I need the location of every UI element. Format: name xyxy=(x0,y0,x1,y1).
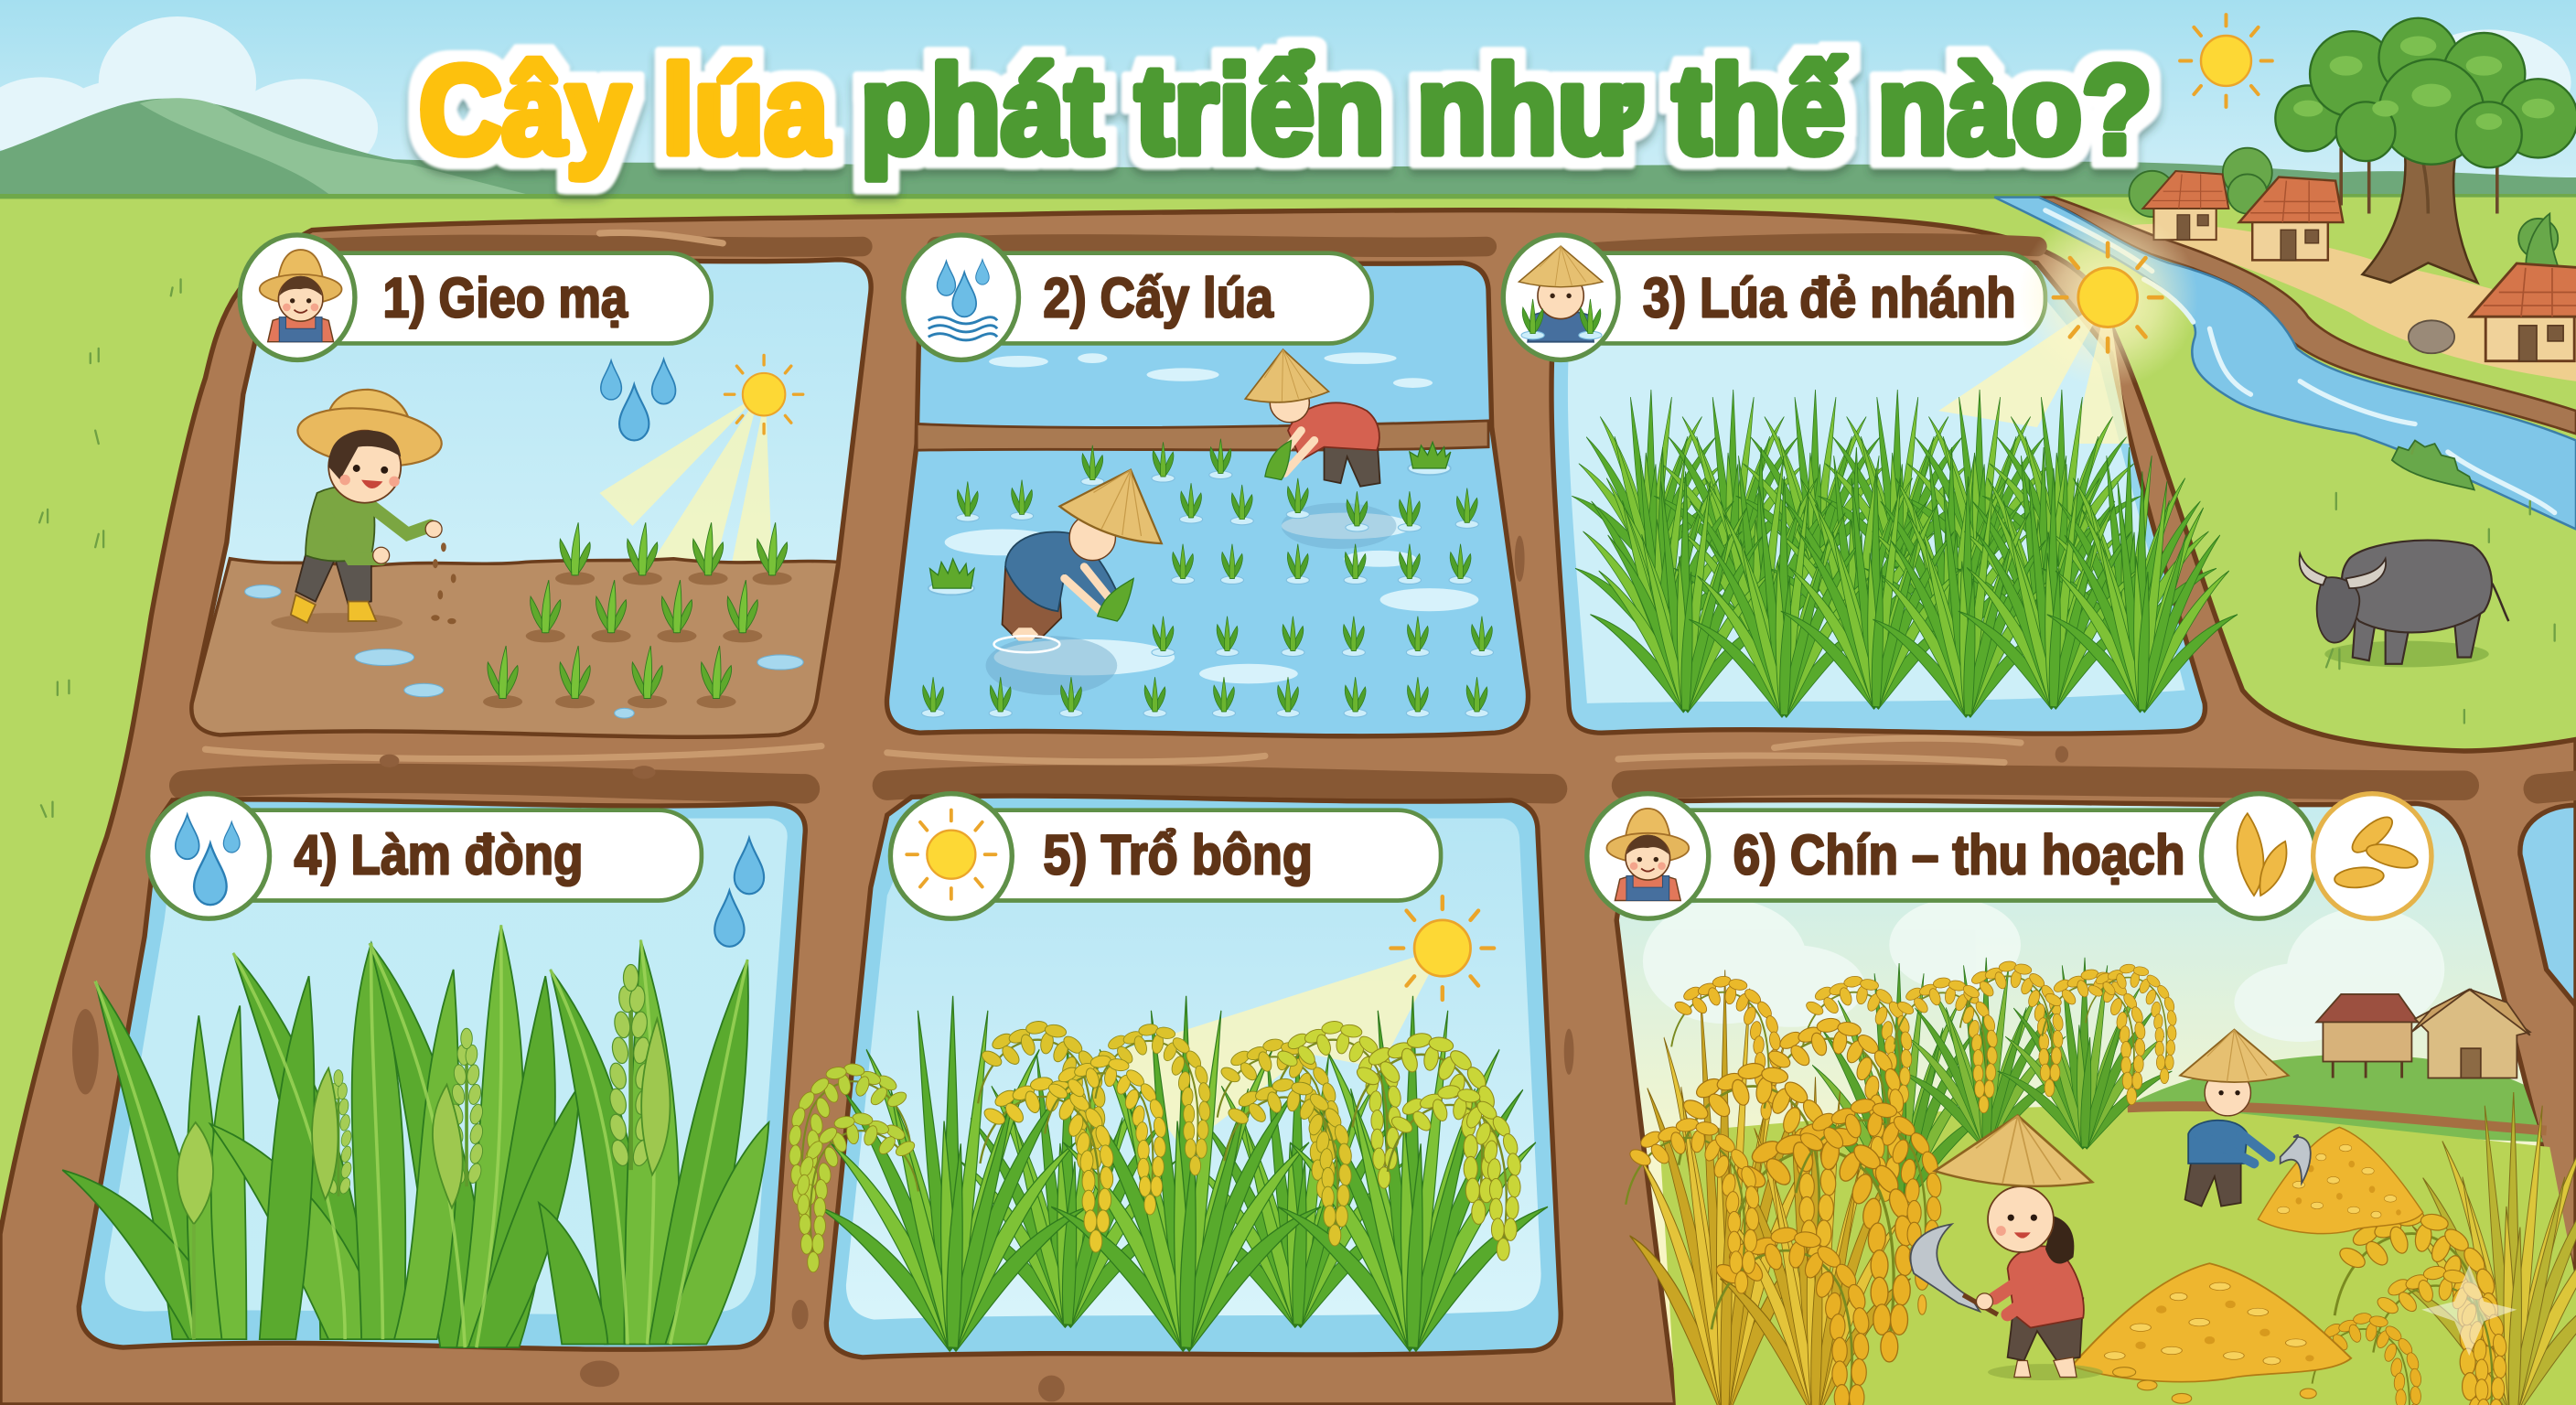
panel 4: Làm đòng xyxy=(62,799,805,1349)
sun beams xyxy=(1938,297,2130,444)
soil xyxy=(192,559,838,736)
badge: rice ears xyxy=(2202,794,2316,918)
water reflection xyxy=(986,636,1117,695)
sky xyxy=(1616,800,2576,1405)
badge: rice grains xyxy=(2313,794,2431,918)
panel 5: Trổ bông xyxy=(788,796,1561,1376)
label 4: Làm đòng xyxy=(148,794,702,918)
sun xyxy=(724,355,803,434)
badge: farmer avatar xyxy=(240,235,355,359)
transplanted seedlings xyxy=(922,439,1493,717)
panel 7 fragment at right edge xyxy=(2520,805,2576,1005)
grain heap large xyxy=(2072,1263,2351,1382)
label text: 3) Lúa đẻ nhánh xyxy=(1643,267,2016,329)
badge: sun xyxy=(890,794,1012,918)
sky and distant landscape xyxy=(0,0,2576,206)
label 6: Chín – thu hoạch xyxy=(1587,794,2431,918)
bush and rock by house xyxy=(2409,320,2454,353)
title: Cây lúa phát triển như thế nào? xyxy=(419,39,2152,179)
inner pale area xyxy=(1568,279,2185,703)
clouds xyxy=(1643,899,2444,1042)
soil puddles xyxy=(245,585,803,718)
farmer in red bending xyxy=(1241,346,1380,487)
buffalo xyxy=(2300,541,2508,667)
back rice plants xyxy=(1803,958,2177,1228)
house middle xyxy=(2239,177,2343,260)
badge: farmer avatar xyxy=(1587,794,1709,918)
seedlings xyxy=(483,522,792,708)
tall leaves and panicles xyxy=(62,925,768,1347)
glow and sun on panel 3 xyxy=(2017,207,2198,388)
house left xyxy=(2143,171,2228,240)
houses xyxy=(2316,989,2530,1078)
label text: 4) Làm đòng xyxy=(294,824,584,886)
ground xyxy=(1659,1106,2576,1405)
far bank xyxy=(2039,198,2576,431)
river highlights xyxy=(2045,210,2555,513)
river water xyxy=(1994,198,2576,529)
label text: 6) Chín – thu hoạch xyxy=(1733,824,2185,886)
panel background xyxy=(826,796,1561,1357)
grass tufts xyxy=(39,279,2555,817)
inner pale area xyxy=(105,819,788,1314)
harvester at back xyxy=(2180,1030,2311,1207)
dividing bund xyxy=(917,421,1488,450)
reflection 2 xyxy=(1282,503,1397,549)
young panicle sheaths xyxy=(177,964,671,1339)
panel 3: Lúa đẻ nhánh xyxy=(1551,260,2238,734)
sun rays xyxy=(600,394,772,567)
label 5: Trổ bông xyxy=(890,794,1441,918)
house right xyxy=(2470,263,2576,361)
panel background xyxy=(79,799,805,1349)
small sun in sky xyxy=(2180,15,2272,107)
clouds xyxy=(0,16,2571,177)
label text: 1) Gieo mạ xyxy=(382,267,628,329)
badge: farmer with seedlings xyxy=(1503,235,1618,359)
leaf midribs xyxy=(95,925,747,1347)
river-side bush xyxy=(2392,440,2474,489)
far bank village and tree xyxy=(2130,15,2576,489)
hills xyxy=(0,98,2576,206)
sun beams xyxy=(1117,949,1443,1151)
panel 6: Chín – thu hoạch xyxy=(1616,800,2576,1405)
corner golden rice right xyxy=(2313,1092,2576,1405)
rice tufts xyxy=(1572,390,2238,734)
label 2: Cấy lúa xyxy=(904,235,1372,359)
raindrops xyxy=(601,359,675,440)
panel 1: Gieo mạ xyxy=(192,260,871,736)
horizon line xyxy=(0,194,2576,198)
river bank xyxy=(2039,198,2576,434)
grain heap small xyxy=(2258,1127,2423,1234)
back hill xyxy=(2136,1055,2543,1142)
harvester in front xyxy=(1911,1110,2103,1380)
banyan tree xyxy=(2275,18,2576,283)
flooded paddy xyxy=(886,262,1529,736)
water sheen xyxy=(945,352,1478,683)
label 3: Lúa đẻ nhánh xyxy=(1503,235,2045,359)
sun xyxy=(1391,896,1494,1000)
field dyke xyxy=(2128,1106,2547,1131)
farmer sowing seeds xyxy=(271,390,456,633)
bushes xyxy=(2130,148,2563,279)
label text: 5) Trổ bông xyxy=(1043,824,1313,886)
label 1: Gieo mạ xyxy=(240,235,712,359)
river and right-hand bank xyxy=(1994,198,2576,529)
inner pale area xyxy=(846,819,1541,1320)
badge: water drops xyxy=(148,794,270,918)
panel background xyxy=(1551,260,2205,734)
label text: 2) Cấy lúa xyxy=(1043,267,1274,329)
panel sky xyxy=(192,260,871,736)
farmer in blue bending xyxy=(994,451,1182,652)
sparkle watermark xyxy=(2421,1265,2517,1356)
rice plants with panicles xyxy=(788,996,1548,1376)
front golden rice left xyxy=(1626,970,1943,1405)
panel 2: Cấy lúa xyxy=(886,262,1529,736)
badge: water drops xyxy=(904,235,1018,359)
raindrops xyxy=(714,838,764,947)
fallen grains xyxy=(1918,1295,2316,1403)
sandy path xyxy=(2120,224,2576,381)
seedling bundles xyxy=(928,442,1451,595)
